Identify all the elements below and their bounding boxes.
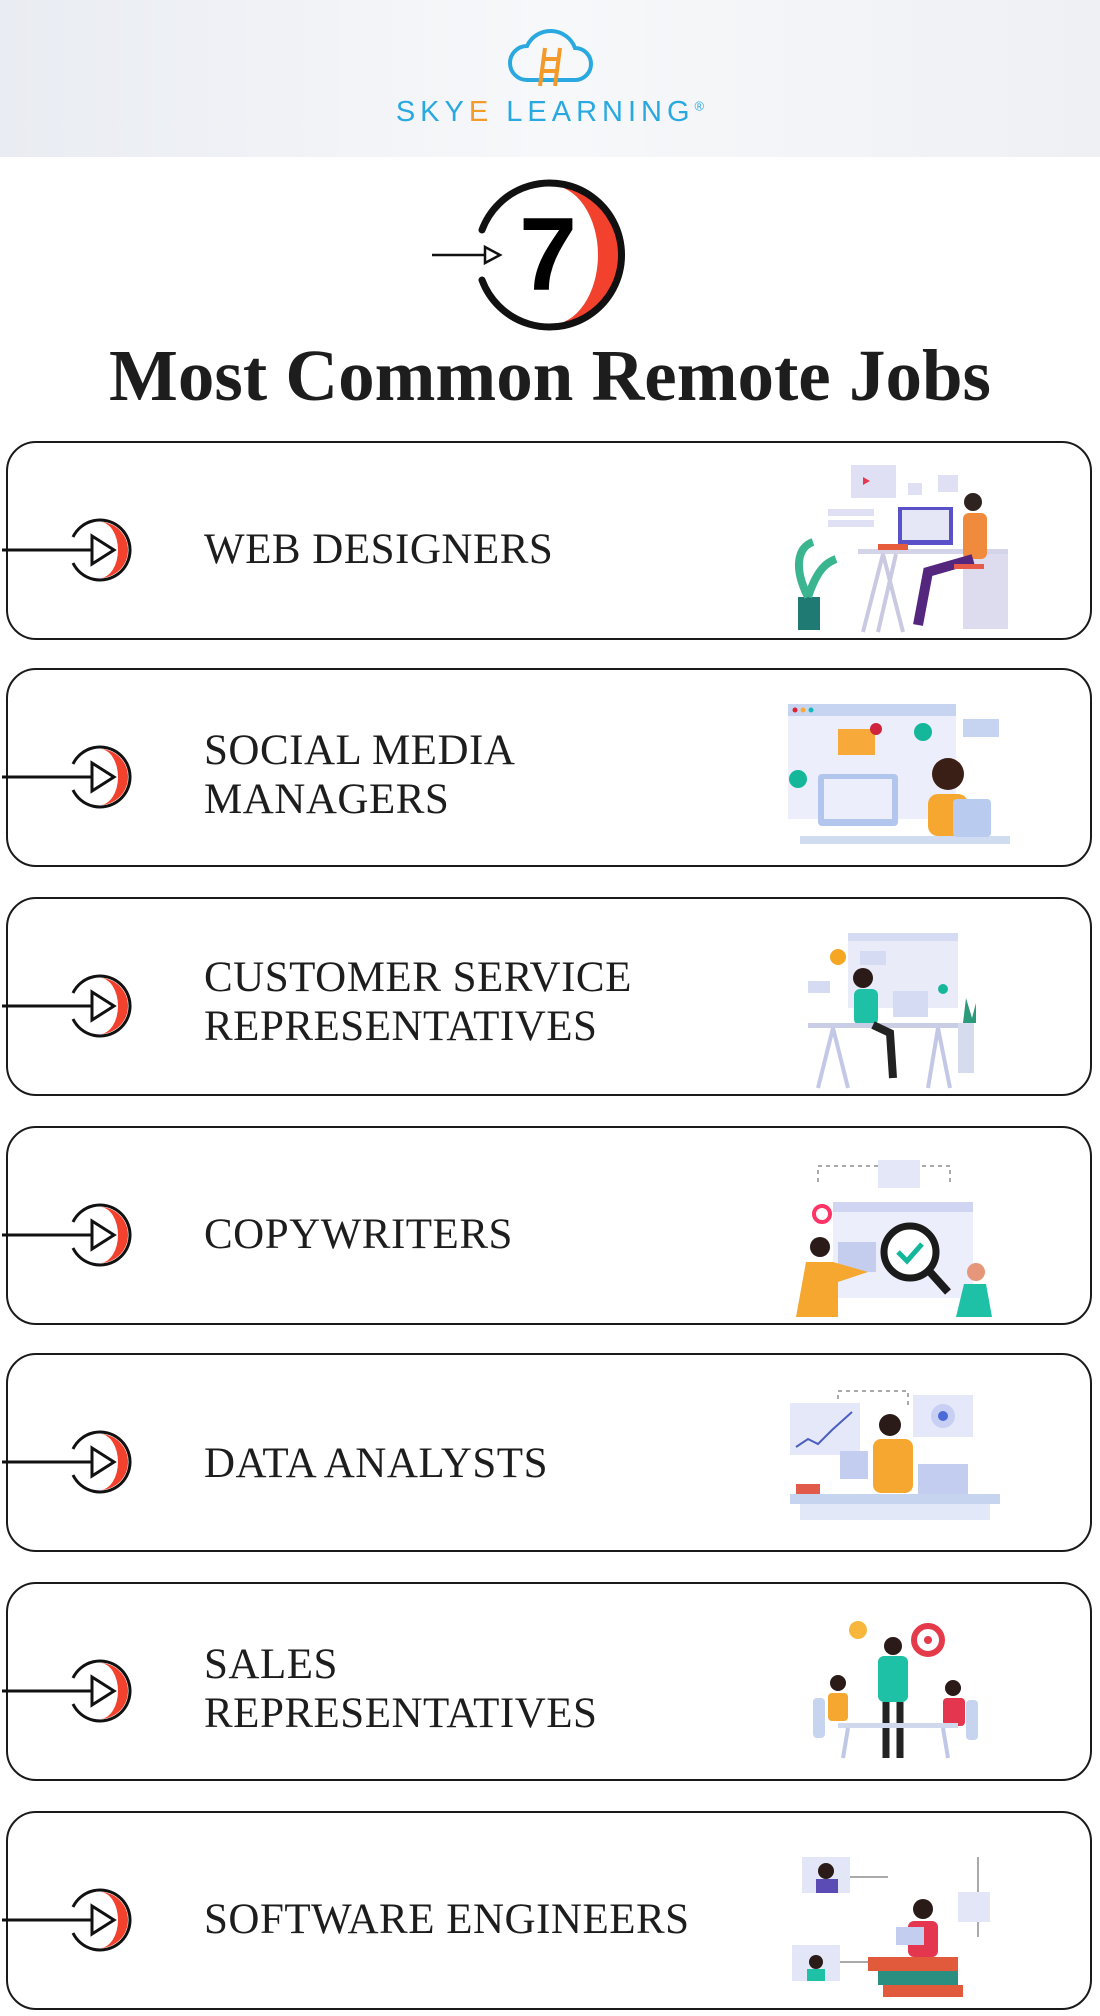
card 7: software engineers: SOFTWARE ENGINEERS [204, 1896, 690, 1943]
card 4: copywriters: COPYWRITERS [204, 1211, 513, 1258]
card 3: customer service: CUSTOMER SERVICE [204, 954, 632, 1001]
illustration: data analysts [790, 1390, 1000, 1520]
illustration: web designer [794, 465, 1008, 632]
illustration: copywriters [796, 1160, 992, 1317]
brand name: SKYE LEARNING® [396, 96, 704, 128]
number 7 badge: 7 [519, 197, 577, 313]
logo cloud [508, 29, 593, 86]
card 1: web designers: WEB DESIGNERS [204, 526, 553, 573]
card 2: social media managers: SOCIAL MEDIA [204, 727, 515, 774]
header band [0, 0, 1100, 157]
illustration: customer service [808, 933, 976, 1088]
illustration: sales team [813, 1621, 978, 1758]
card 3: customer service: REPRESENTATIVES [204, 1003, 597, 1050]
card 6: sales representatives: REPRESENTATIVES [204, 1690, 597, 1737]
card 5: data analysts [6, 1353, 1092, 1552]
illustration: social media [788, 704, 1010, 844]
card 2: social media managers [6, 668, 1092, 867]
card 5: data analysts: DATA ANALYSTS [204, 1440, 548, 1487]
card 1: web designers [6, 441, 1092, 640]
card 2: social media managers: MANAGERS [204, 776, 449, 823]
card 6: sales representatives [6, 1582, 1092, 1781]
card 6: sales representatives: SALES [204, 1641, 338, 1688]
card 7: software engineers [6, 1811, 1092, 2010]
title: Most Common Remote Jobs [109, 335, 991, 416]
illustration: software engineers [792, 1857, 990, 1997]
card 3: customer service [6, 897, 1092, 1096]
number 7 badge [432, 180, 625, 330]
card 4: copywriters [6, 1126, 1092, 1325]
